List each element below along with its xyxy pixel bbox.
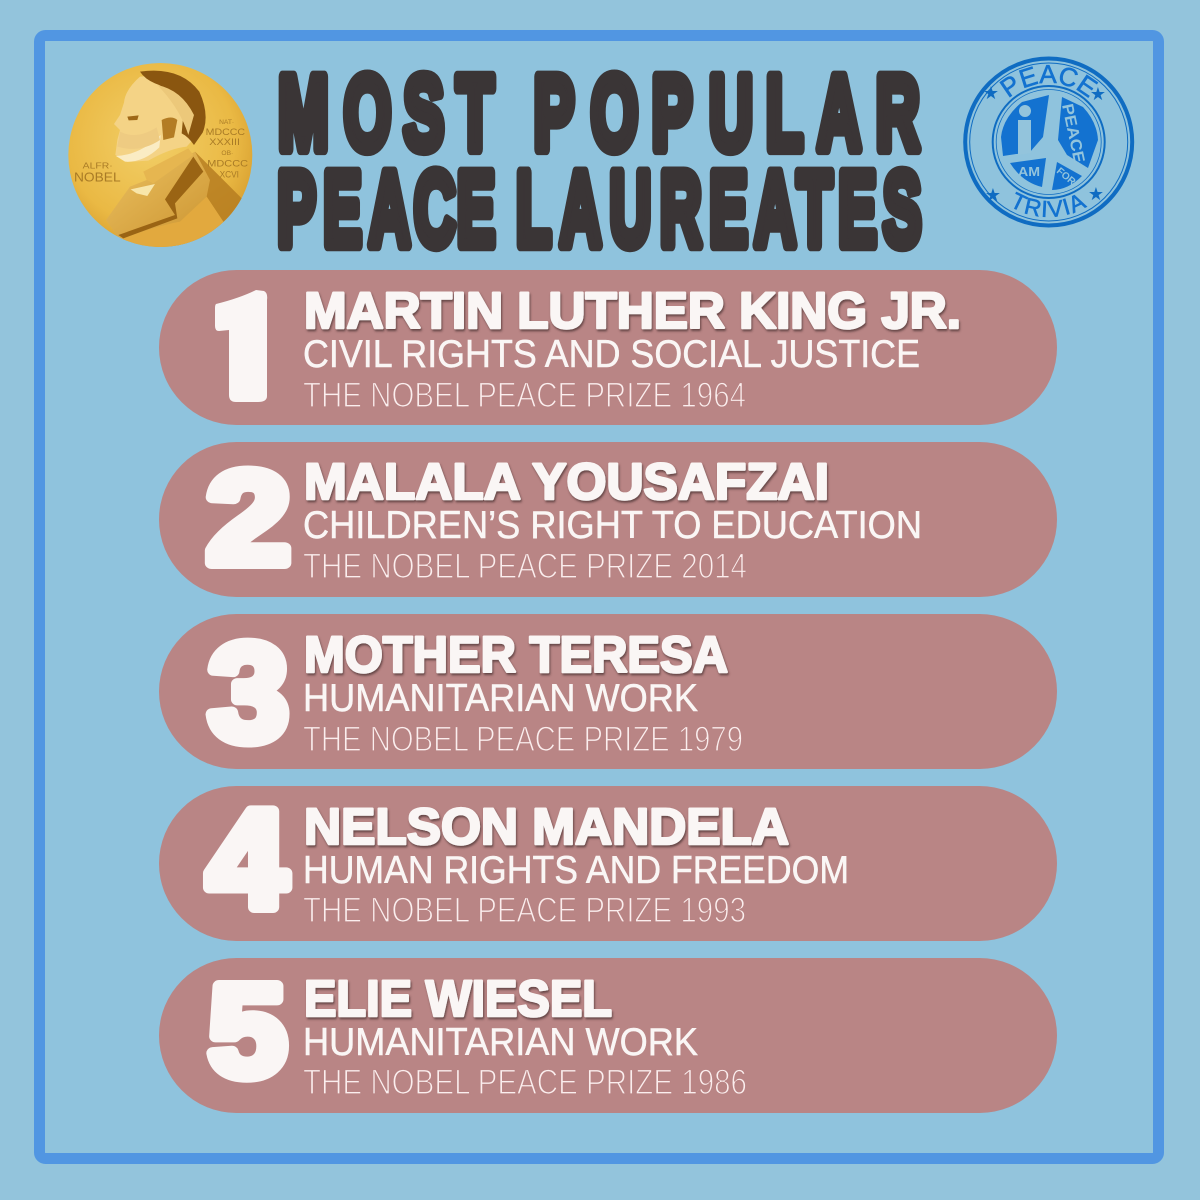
medal inscriptions: MDCCC bbox=[207, 159, 249, 169]
medal inscriptions: XXXIII bbox=[209, 137, 240, 147]
title line 1: MOST POPULAR bbox=[278, 56, 920, 172]
panel: laureate 2 bbox=[159, 442, 1057, 597]
icon: Peace Trivia badge: FOR bbox=[1054, 166, 1078, 188]
rank number: 5 bbox=[208, 958, 286, 1104]
icon: Nobel medal bbox=[68, 63, 252, 253]
prize: THE NOBEL PEACE PRIZE 1986 bbox=[303, 1063, 747, 1102]
rank number: 4 bbox=[207, 782, 287, 937]
title line 2: PEACE LAUREATES bbox=[277, 151, 921, 267]
panel: laureate 5 bbox=[159, 958, 1057, 1113]
prize: THE NOBEL PEACE PRIZE 1964 bbox=[303, 376, 746, 415]
badge peace sign quadrants bbox=[1001, 95, 1049, 156]
prize: THE NOBEL PEACE PRIZE 2014 bbox=[303, 547, 747, 586]
medal coat bbox=[106, 152, 243, 253]
medal inscriptions: XCVI bbox=[220, 169, 239, 179]
medal inscriptions: OB· bbox=[221, 150, 233, 157]
name: MOTHER TERESA bbox=[304, 626, 728, 683]
badge words: PEACE bbox=[1058, 102, 1087, 165]
cause: HUMANITARIAN WORK bbox=[303, 677, 698, 720]
panel: laureate 4 bbox=[159, 782, 1057, 941]
cause: HUMAN RIGHTS AND FREEDOM bbox=[303, 849, 849, 892]
medal inscriptions: NAT· bbox=[219, 119, 234, 126]
rank number: 1 bbox=[231, 278, 267, 424]
medal neck bbox=[144, 148, 192, 180]
medal inscriptions bbox=[74, 119, 249, 185]
prize: THE NOBEL PEACE PRIZE 1979 bbox=[303, 720, 743, 759]
badge letter i bbox=[1018, 105, 1031, 155]
medal inscriptions: ALFR· bbox=[83, 160, 113, 170]
name: ELIE WIESEL bbox=[304, 970, 612, 1027]
icon: Peace Trivia badge: TRIVIA bbox=[1014, 192, 1088, 218]
badge stars: ★ bbox=[985, 185, 1001, 205]
name: MALALA YOUSAFZAI bbox=[304, 453, 829, 510]
medal inscriptions: MDCCC bbox=[206, 127, 246, 137]
icon: Peace Trivia badge: AM bbox=[1018, 164, 1040, 179]
rank number: 3 bbox=[208, 616, 288, 770]
rank number bbox=[215, 278, 267, 424]
prize: THE NOBEL PEACE PRIZE 1993 bbox=[303, 891, 746, 930]
badge stars: ★ bbox=[1090, 84, 1106, 104]
badge stars bbox=[983, 83, 1106, 205]
badge stars: ★ bbox=[983, 83, 999, 103]
badge curved text: PEACE bbox=[999, 64, 1098, 98]
title bbox=[277, 56, 921, 267]
cause: CHILDREN’S RIGHT TO EDUCATION bbox=[303, 504, 922, 547]
panel: laureate 1 bbox=[159, 270, 1057, 425]
icon: Peace Trivia badge bbox=[963, 56, 1134, 228]
medal inscriptions: NOBEL bbox=[74, 170, 121, 185]
rank number: 2 bbox=[206, 444, 290, 591]
badge stars: ★ bbox=[1088, 184, 1104, 204]
cause: CIVIL RIGHTS AND SOCIAL JUSTICE bbox=[303, 333, 920, 376]
medal head bbox=[114, 76, 191, 162]
cause: HUMANITARIAN WORK bbox=[303, 1021, 698, 1064]
panel: laureate 3 bbox=[159, 614, 1057, 770]
name: NELSON MANDELA bbox=[304, 798, 789, 855]
name: MARTIN LUTHER KING JR. bbox=[304, 282, 961, 339]
